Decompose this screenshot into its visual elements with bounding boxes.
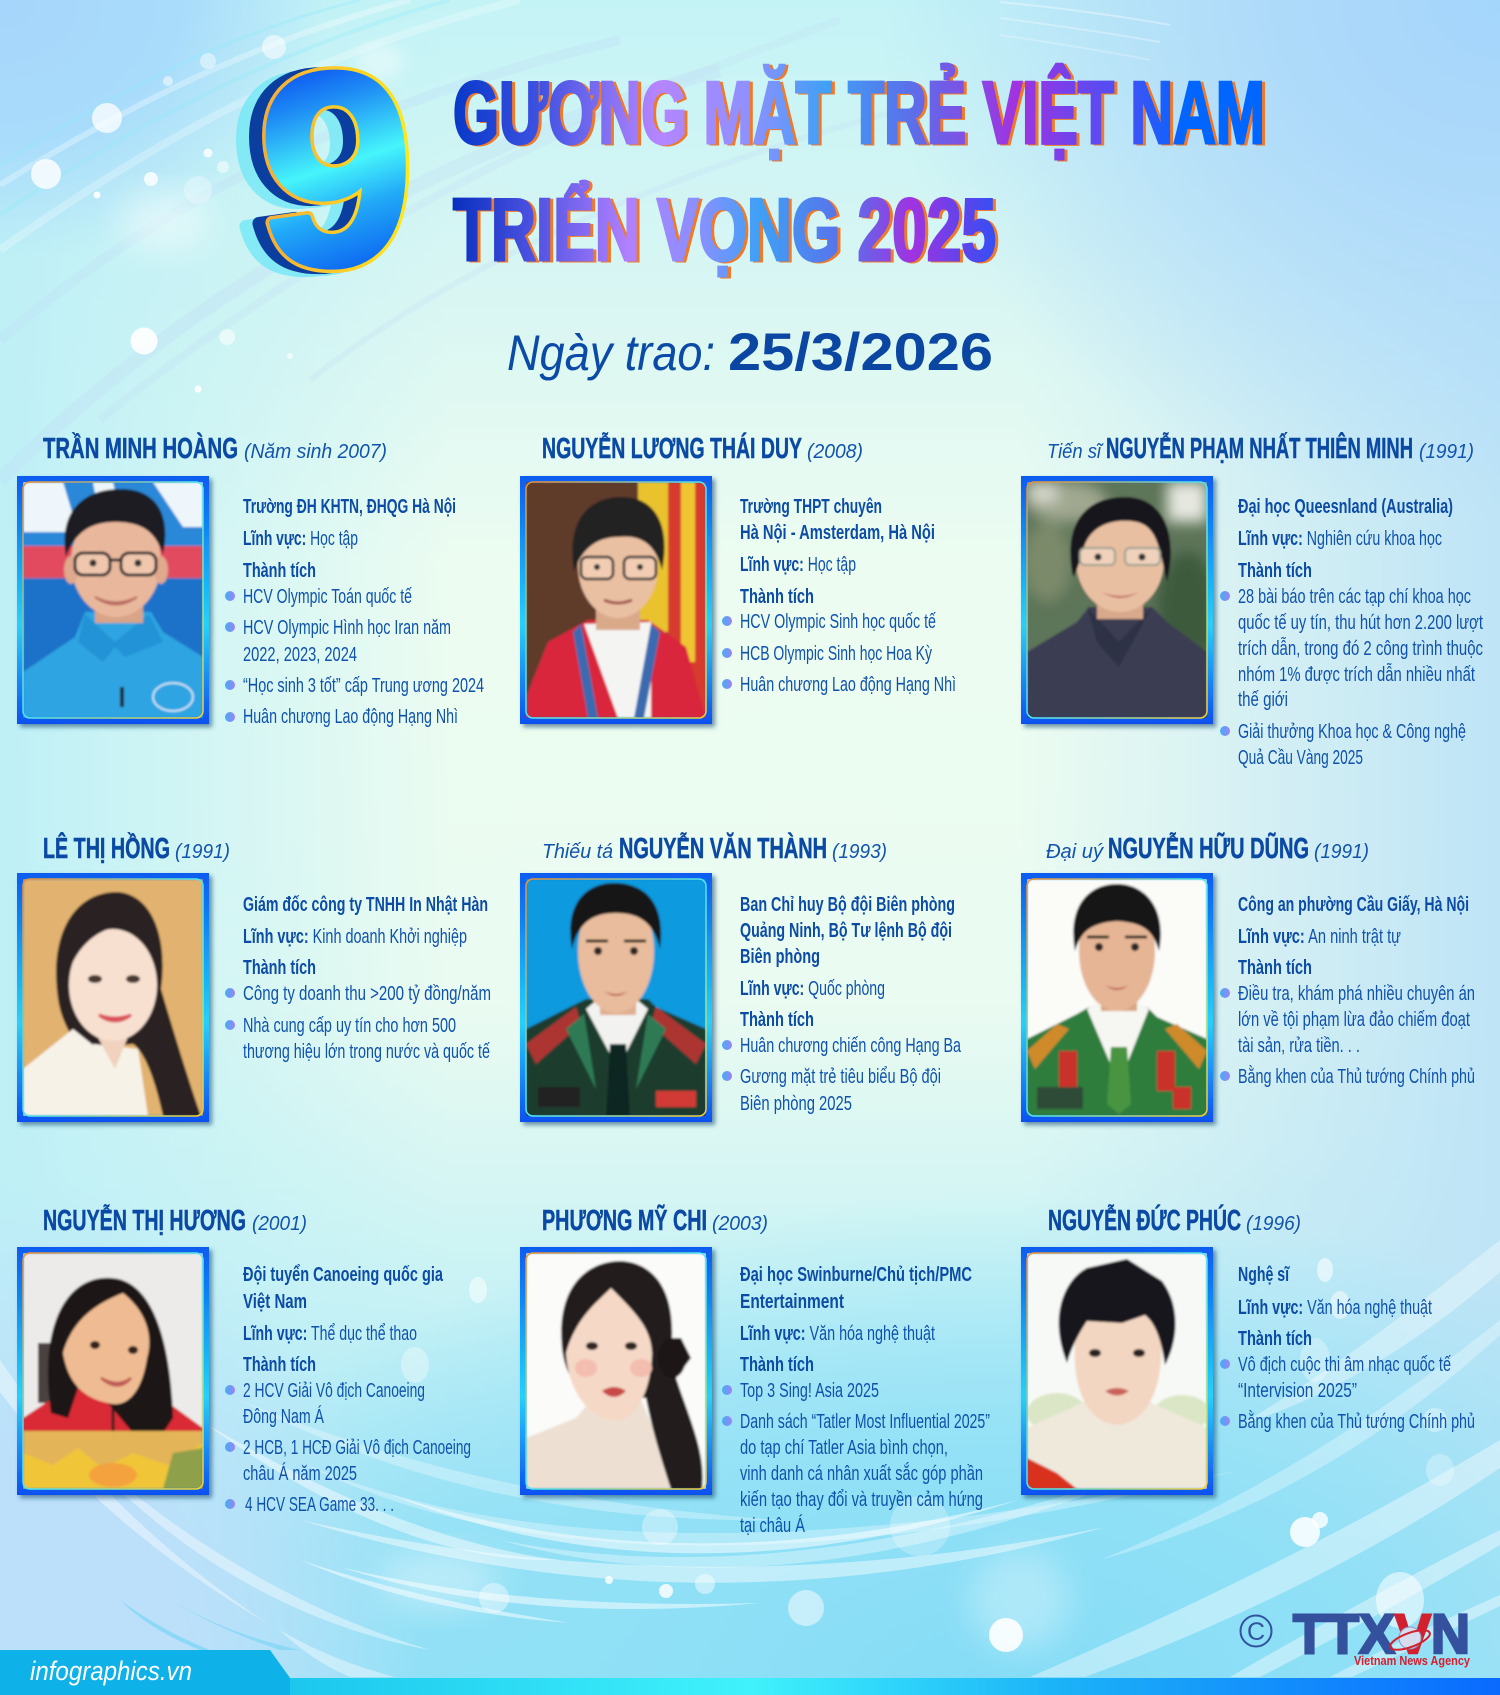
name: NGUYỄN ĐỨC PHÚC [1048, 1203, 1241, 1237]
portrait [1021, 873, 1213, 1122]
affiliation and field: Quảng Ninh, Bộ Tư lệnh Bộ đội [740, 919, 952, 942]
name: NGUYỄN THỊ HƯƠNG [43, 1203, 246, 1237]
portrait [17, 1247, 209, 1495]
award date: Ngày trao: [507, 325, 715, 381]
panel: Nguyễn Lương Thái Duy [520, 431, 956, 724]
achievements: Thành tích [740, 585, 814, 608]
achievements: 2 HCV Giải Vô địch Canoeing [243, 1379, 425, 1402]
achievements: Thành tích [1238, 956, 1312, 979]
name: (Năm sinh 2007) [244, 440, 387, 463]
achievements: Thành tích [243, 1353, 316, 1376]
footer tab: website [0, 1650, 290, 1695]
name: TRẦN MINH HOÀNG [43, 431, 238, 465]
panel: Nguyễn Đức Phúc [1021, 1203, 1475, 1495]
affiliation and field [243, 1263, 443, 1345]
affiliation and field [740, 1263, 972, 1345]
achievements: Thành tích [243, 559, 316, 582]
panel: Phương Mỹ Chi [520, 1203, 990, 1537]
affiliation and field: Giám đốc công ty TNHH In Nhật Hàn [243, 893, 488, 916]
affiliation and field: Lĩnh vực: An ninh trật tự [1238, 925, 1401, 948]
name: (2001) [252, 1212, 307, 1235]
affiliation and field: Lĩnh vực: Nghiên cứu khoa học [1238, 527, 1442, 550]
achievements: Biên phòng 2025 [740, 1092, 852, 1115]
achievements [1220, 1327, 1475, 1433]
achievements: Huân chương Lao động Hạng Nhì [243, 705, 458, 728]
achievements: HCV Olympic Toán quốc tế [243, 585, 412, 608]
panel: Nguyễn Văn Thành [520, 831, 961, 1122]
panel: Nguyễn Thị Hương [17, 1203, 471, 1516]
achievements: HCV Olympic Hình học Iran năm [243, 616, 451, 639]
portrait [1021, 476, 1217, 724]
affiliation and field: Lĩnh vực: Học tập [740, 553, 856, 576]
name: (2008) [807, 440, 863, 463]
achievements: 2022, 2023, 2024 [243, 643, 357, 666]
affiliation and field: Lĩnh vực: Quốc phòng [740, 977, 885, 1000]
big number 9: 9 [259, 17, 413, 323]
affiliation and field: Trường ĐH KHTN, ĐHQG Hà Nội [243, 495, 456, 518]
name: NGUYỄN LƯƠNG THÁI DUY [542, 431, 802, 465]
achievements: châu Á năm 2025 [243, 1462, 357, 1485]
affiliation and field: Lĩnh vực: Văn hóa nghệ thuật [1238, 1296, 1432, 1319]
achievements: Danh sách “Tatler Most Influential 2025” [740, 1410, 990, 1433]
achievements: do tạp chí Tatler Asia bình chọn, [740, 1436, 948, 1459]
achievements: HCV Olympic Sinh học quốc tế [740, 610, 936, 633]
logo: TTXVN: TTXVN [1293, 1602, 1470, 1665]
achievements: Thành tích [740, 1008, 814, 1031]
affiliation and field: Ban Chỉ huy Bộ đội Biên phòng [740, 893, 955, 916]
award date: 25/3/2026 [728, 323, 993, 382]
achievements: Đông Nam Á [243, 1405, 324, 1428]
name: (1991) [1314, 840, 1369, 863]
achievements [225, 956, 491, 1063]
affiliation and field: Nghệ sĩ [1238, 1263, 1290, 1286]
panel: Trần Minh Hoàng [17, 431, 484, 728]
affiliation and field [1238, 1263, 1432, 1319]
name: Đại uý [1046, 840, 1105, 863]
portrait [520, 873, 712, 1122]
achievements: HCB Olympic Sinh học Hoa Kỳ [740, 642, 933, 665]
name: (1993) [832, 840, 887, 863]
background swooshes bottom [0, 1240, 1500, 1677]
big number 9: 9 [259, 17, 413, 323]
name: (1996) [1246, 1212, 1301, 1235]
affiliation and field: Lĩnh vực: Học tập [243, 527, 358, 550]
copyright mark [1240, 1616, 1272, 1646]
achievements [1220, 559, 1483, 769]
affiliation and field: Hà Nội - Amsterdam, Hà Nội [740, 521, 935, 544]
name: (1991) [175, 840, 230, 863]
achievements: tại châu Á [740, 1514, 805, 1537]
affiliation and field: Lĩnh vực: Kinh doanh Khởi nghiệp [243, 925, 467, 948]
achievements [722, 1008, 961, 1115]
affiliation and field [243, 495, 456, 550]
achievements [225, 1353, 471, 1516]
portrait [17, 873, 209, 1122]
affiliation and field: Đội tuyển Canoeing quốc gia [243, 1263, 443, 1286]
affiliation and field: Trường THPT chuyên [740, 495, 882, 518]
name: Tiến sĩ [1047, 440, 1104, 463]
achievements: Thành tích [1238, 559, 1312, 582]
achievements: Thành tích [740, 1353, 814, 1376]
achievements: kiến tạo thay đổi và truyền cảm hứng [740, 1488, 983, 1511]
affiliation and field [740, 495, 935, 576]
name [542, 831, 887, 865]
name: Thiếu tá [542, 840, 613, 863]
name: NGUYỄN HỮU DŨNG [1108, 831, 1309, 865]
name: PHƯƠNG MỸ CHI [542, 1203, 707, 1237]
achievements [722, 585, 956, 696]
panel: Lê Thị Hồng [17, 831, 491, 1122]
portrait [17, 476, 209, 724]
copyright mark: C [1247, 1618, 1265, 1646]
name: LÊ THỊ HỒNG [43, 831, 170, 865]
award date [507, 323, 993, 382]
achievements: “Intervision 2025” [1238, 1379, 1357, 1402]
achievements: Gương mặt trẻ tiêu biểu Bộ đội [740, 1065, 941, 1088]
achievements: vinh danh cá nhân xuất sắc góp phần [740, 1462, 983, 1485]
affiliation and field: Lĩnh vực: Văn hóa nghệ thuật [740, 1322, 935, 1345]
affiliation and field: Lĩnh vực: Thể dục thể thao [243, 1322, 417, 1345]
footer tab: website: infographics.vn [30, 1656, 192, 1686]
footer band [0, 1678, 1500, 1695]
logo: TTXVN: Vietnam News Agency [1354, 1654, 1470, 1668]
portrait [1021, 1247, 1213, 1495]
affiliation and field: Entertainment [740, 1290, 844, 1313]
affiliation and field: Biên phòng [740, 945, 820, 968]
affiliation and field: Việt Nam [243, 1290, 307, 1313]
achievements: thương hiệu lớn trong nước và quốc tế [243, 1040, 490, 1063]
portrait [520, 476, 712, 724]
affiliation and field [1238, 495, 1453, 550]
portrait [520, 1247, 712, 1495]
achievements: Huân chương chiến công Hạng Ba [740, 1034, 961, 1057]
title [453, 63, 1265, 279]
name [1046, 831, 1369, 865]
name: (1991) [1419, 440, 1474, 463]
name: NGUYỄN VĂN THÀNH [619, 831, 827, 865]
achievements: 4 HCV SEA Game 33. . . [245, 1493, 394, 1516]
achievements: Công ty doanh thu >200 tỷ đồng/năm [243, 982, 491, 1005]
panel: Nguyễn Hữu Dũng [1021, 831, 1475, 1122]
achievements: thế giới [1238, 688, 1288, 711]
affiliation and field [243, 893, 488, 948]
achievements: Nhà cung cấp uy tín cho hơn 500 [243, 1014, 456, 1037]
achievements: tài sản, rửa tiền. . . [1238, 1034, 1360, 1057]
achievements: Quả Cầu Vàng 2025 [1238, 746, 1363, 769]
panel: Nguyễn Phạm Nhất Thiên Minh [1021, 431, 1483, 769]
affiliation and field [740, 893, 955, 1000]
name: (2003) [712, 1212, 768, 1235]
achievements: “Học sinh 3 tốt” cấp Trung ương 2024 [243, 674, 484, 697]
affiliation and field [1238, 893, 1469, 948]
achievements [722, 1353, 990, 1537]
title: TRIỂN VỌNG 2025 [453, 180, 996, 279]
achievements: Huân chương Lao động Hạng Nhì [740, 673, 956, 696]
achievements: Thành tích [1238, 1327, 1312, 1350]
achievements: 2 HCB, 1 HCĐ Giải Vô địch Canoeing [243, 1436, 471, 1459]
achievements: Top 3 Sing! Asia 2025 [740, 1379, 879, 1402]
achievements: Thành tích [243, 956, 316, 979]
achievements [1220, 956, 1475, 1088]
background swooshes top [0, 0, 1170, 480]
achievements [225, 559, 484, 728]
affiliation and field: Đại học Swinburne/Chủ tịch/PMC [740, 1263, 972, 1286]
